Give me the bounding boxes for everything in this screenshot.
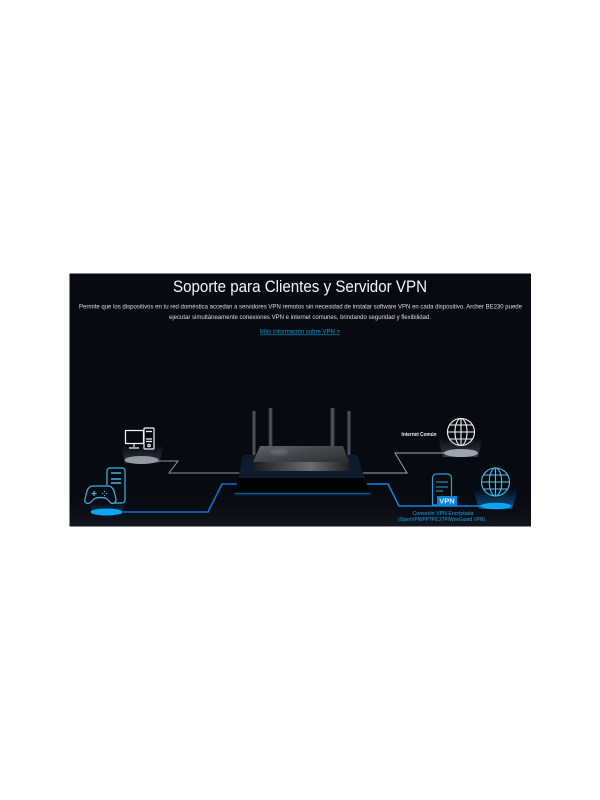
title: Soporte para Clientes y Servidor VPN xyxy=(173,278,427,296)
label: encrypted VPN connection xyxy=(398,511,485,523)
gaming glow platform xyxy=(90,503,124,516)
blue connection line: router to encrypted VPN internet xyxy=(362,484,482,506)
icon: VPN server: VPN xyxy=(439,496,455,506)
icon: internet globe xyxy=(448,418,474,446)
VPN badge xyxy=(437,496,457,506)
platform under router xyxy=(234,455,371,495)
icon: computer xyxy=(126,428,154,449)
description text: ejecutar simultáneamente conexiones VPN e internet comunes, brindando seguridad y flexibilidad. xyxy=(169,314,431,321)
description text: Permite que los dispositivos en tu red doméstica accedan a servidores VPN remotos sin necesidad de instalar software VPN en cada dispositivo. Archer BE230 puede xyxy=(79,304,523,310)
antennas xyxy=(252,408,351,455)
blue connection line: gaming devices to router xyxy=(123,484,240,512)
label: Internet Común: Internet Común xyxy=(402,432,436,438)
computer glow platform xyxy=(121,445,164,464)
description text xyxy=(79,304,523,321)
router xyxy=(252,408,351,471)
icon: VPN globe xyxy=(482,468,510,496)
internet glow platform xyxy=(438,437,483,457)
gray connection line: router to internet xyxy=(362,453,447,473)
VPN globe glow platform xyxy=(473,489,518,509)
label: encrypted VPN connection: Conexión VPN Encriptada xyxy=(412,511,474,517)
link: more VPN information: Más información sobre VPN > xyxy=(260,328,340,336)
router body xyxy=(253,446,349,462)
label: encrypted VPN connection: (OpenVPN/PPTP/L2TP/WireGuard VPN) xyxy=(398,517,485,523)
gray connection line: computer to router xyxy=(157,461,240,473)
icon: VPN server xyxy=(432,474,457,506)
panel: dark background xyxy=(70,274,531,526)
icon: gaming server and controller xyxy=(85,468,125,503)
